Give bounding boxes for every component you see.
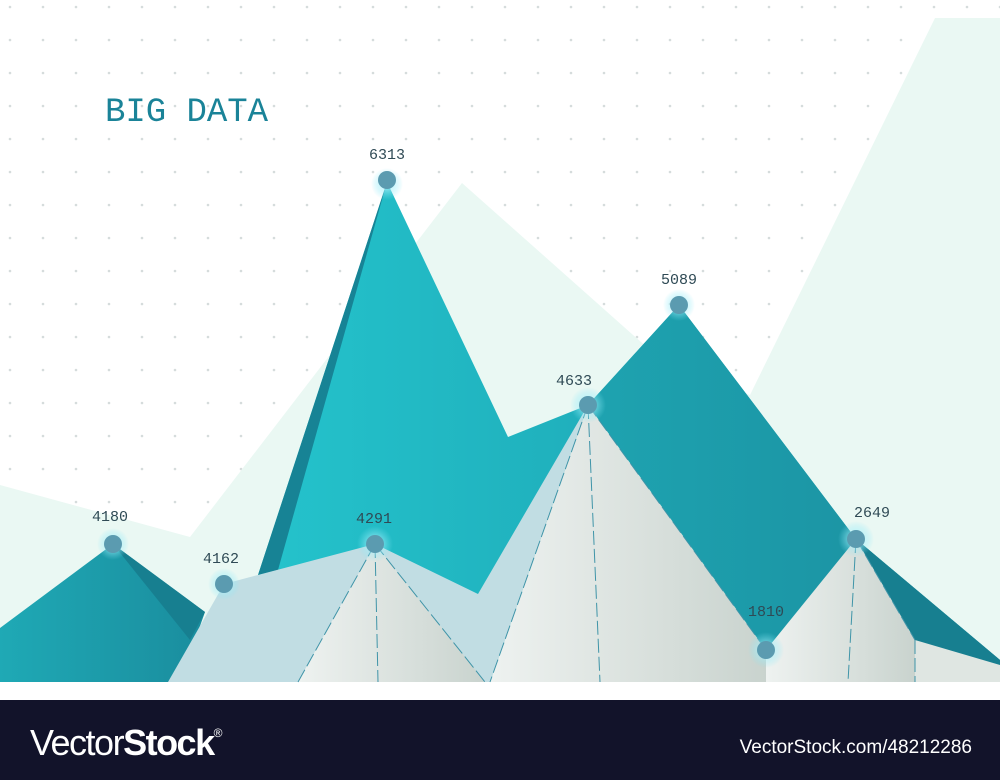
value labels: 5089 [661,272,697,289]
value labels [92,147,890,621]
footer: ® [214,726,223,740]
value labels: 4291 [356,511,392,528]
gray pyramids [298,405,1000,682]
data points [97,168,874,668]
value labels: 4633 [556,373,592,390]
value labels: 6313 [369,147,405,164]
footer [0,700,1000,780]
teal main area [258,182,1000,682]
value labels: 2649 [854,505,890,522]
footer: VectorStock [30,722,214,763]
value labels: 4180 [92,509,128,526]
title: BIG DATA [105,94,271,132]
value labels: 4162 [203,551,239,568]
light blue layer [168,405,588,682]
left teal mountain [0,544,205,682]
value labels: 1810 [748,604,784,621]
footer: VectorStock.com/48212286 [740,737,972,758]
